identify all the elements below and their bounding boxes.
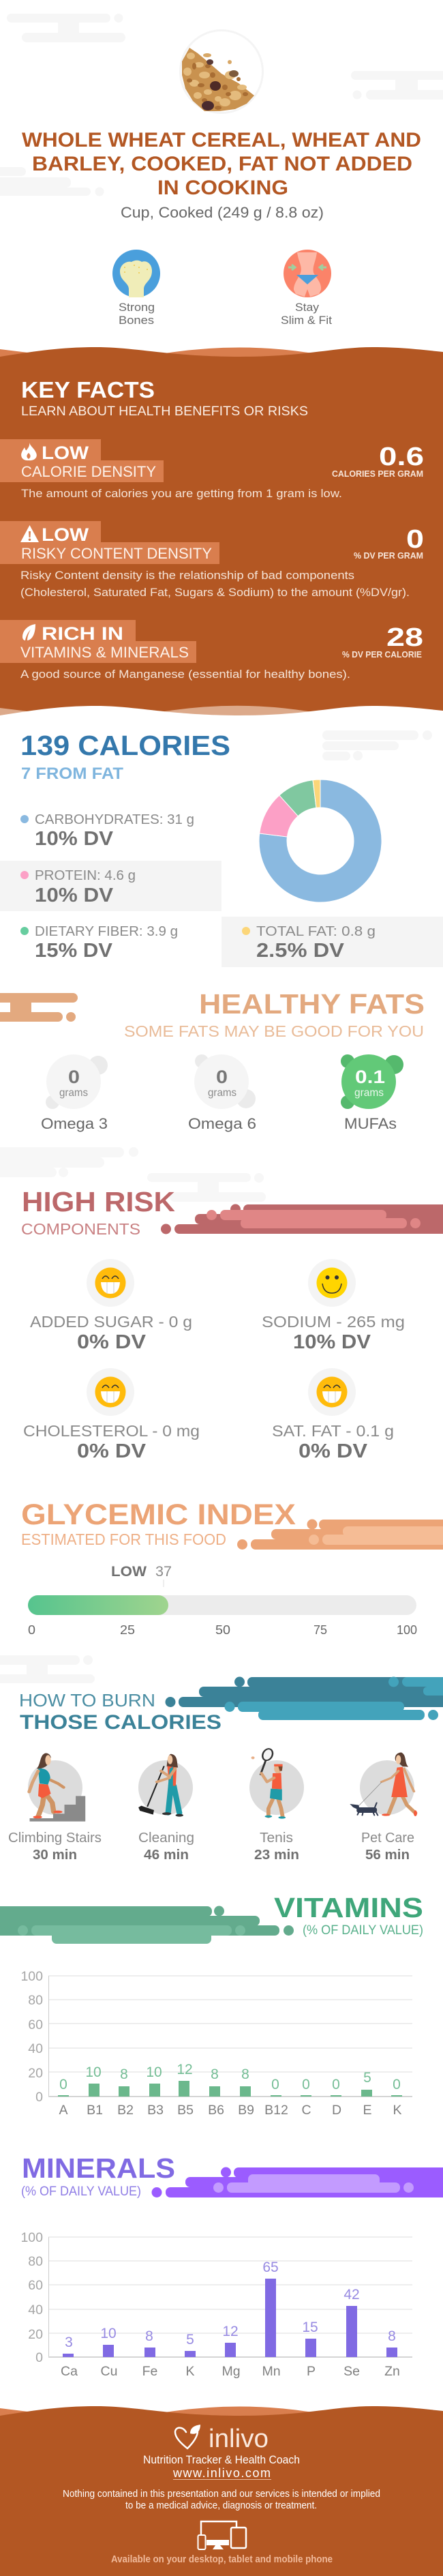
bar chart: vitamins: B12 (264, 2103, 288, 2118)
fat: MUFAs: 0.1 (355, 1067, 385, 1087)
title: IN COOKING (157, 177, 288, 199)
icon: warning triangle (20, 525, 39, 542)
bar chart: minerals: Ca (61, 2364, 78, 2379)
benefit label: strong bones: Bones (119, 314, 154, 327)
decoration: high risk banner (161, 1204, 443, 1234)
nutrient: total fat (222, 917, 443, 967)
stat: 0.6 calories per gram: CALORIES PER GRAM (332, 469, 423, 479)
fat: omega 3: 0 (68, 1067, 80, 1087)
stat: 28 % DV per calorie (342, 623, 423, 660)
activity: tennis (249, 1748, 304, 1863)
risk item: added sugar (30, 1259, 192, 1353)
icon: inlivo heart logo (175, 2425, 200, 2448)
bar chart: vitamins: B6 (208, 2103, 224, 2118)
risk item: cholesterol: 0% DV (77, 1440, 147, 1462)
bar chart: vitamins: 100 (20, 1969, 43, 1984)
bar chart: vitamins: 8 (241, 2067, 249, 2082)
benefit label: stay slim and fit (281, 301, 332, 327)
icon: devices (198, 2521, 246, 2549)
bar chart: minerals: 40 (28, 2303, 43, 2318)
activity: climbing stairs: 30 min (33, 1848, 77, 1863)
bar chart: vitamins: A (59, 2103, 68, 2118)
bar chart: minerals: 20 (28, 2327, 43, 2342)
fat: omega 6: grams (208, 1087, 236, 1099)
bar chart: minerals: P (307, 2364, 316, 2379)
fat: omega 6 (188, 1054, 256, 1132)
fat: omega 6: Omega 6 (188, 1115, 256, 1132)
icon: leaf (22, 624, 35, 640)
bar chart: minerals: 42 (343, 2287, 360, 2303)
stat: 0.6 calories per gram (332, 443, 424, 479)
subheading: minerals daily value: (% OF DAILY VALUE) (21, 2184, 141, 2199)
tagline: Nutrition Tracker & Health Coach (143, 2453, 300, 2466)
bar chart: vitamins: 0 (59, 2077, 67, 2092)
risk item: saturated fat: 0% DV (299, 1440, 368, 1462)
activity: climbing stairs: Climbing Stairs (8, 1831, 102, 1846)
nutrient: protein: PROTEIN: 4.6 g (35, 868, 136, 883)
fact tag: risky content density (0, 521, 219, 564)
heading: how to burn: HOW TO BURN (19, 1690, 155, 1711)
activity: climbing stairs (8, 1753, 102, 1863)
nutrient: protein (0, 861, 222, 911)
panel: key facts (0, 347, 443, 723)
bar chart: minerals: Mg (222, 2364, 241, 2379)
decoration: vitamins banner (0, 1906, 294, 1944)
fat: omega 6: 0 (216, 1067, 228, 1087)
risk item: sodium (262, 1259, 405, 1353)
bar chart: minerals: 12 (222, 2324, 239, 2339)
bar chart: vitamins: 0 (332, 2077, 340, 2092)
stat: 0 % DV per gram: 0 (406, 525, 424, 554)
stat: 28 % DV per calorie: 28 (386, 623, 423, 652)
stat: 0 % DV per gram (354, 525, 424, 561)
activity: cleaning (138, 1754, 194, 1863)
fact tag: calorie density: CALORIE DENSITY (21, 463, 156, 480)
bar chart: vitamins: B3 (147, 2103, 164, 2118)
fat: MUFAs: MUFAs (344, 1115, 397, 1132)
bar chart: minerals: K (185, 2364, 195, 2379)
bar chart: vitamins: 0 (271, 2077, 279, 2092)
bar chart: minerals: 0 (35, 2350, 43, 2365)
heading: those calories: THOSE CALORIES (20, 1711, 222, 1734)
glycemic progress bar (28, 1595, 416, 1615)
bar chart: vitamins: C (301, 2103, 311, 2118)
bar chart: vitamins: 12 (177, 2062, 193, 2077)
risk item: sodium: SODIUM - 265 mg (262, 1313, 405, 1331)
fat: omega 3: grams (59, 1087, 88, 1099)
activity: tennis: Tenis (260, 1831, 293, 1846)
availability note: Available on your desktop, tablet and mobile phone (111, 2553, 333, 2565)
bar chart: vitamins: D (332, 2103, 341, 2118)
description: risky content density (20, 569, 410, 599)
glycemic axis labels: 50 (215, 1623, 230, 1637)
risk item: cholesterol: CHOLESTEROL - 0 mg (23, 1422, 200, 1440)
title: WHOLE WHEAT CEREAL, WHEAT AND (22, 129, 421, 151)
description: risky content density: Risky Content density is the relationship of bad components (20, 569, 354, 582)
bar chart: vitamins: 20 (28, 2066, 43, 2081)
disclaimer: Nothing contained in this presentation and our services is intended or implied (63, 2488, 380, 2500)
description: calorie density: The amount of calories you are getting from 1 gram is low. (21, 487, 342, 500)
risk item: sodium: 10% DV (293, 1331, 371, 1353)
heading: high risk: HIGH RISK (22, 1186, 175, 1217)
nutrient: dietary fiber: DIETARY FIBER: 3.9 g (35, 923, 178, 939)
risk item: saturated fat: SAT. FAT - 0.1 g (272, 1422, 394, 1440)
subheading: from fat: 7 FROM FAT (21, 765, 123, 783)
bar chart: minerals: 60 (28, 2278, 43, 2293)
nutrient: dietary fiber (20, 923, 178, 962)
bar chart: minerals: 80 (28, 2254, 43, 2269)
glycemic axis labels: 75 (314, 1623, 327, 1637)
subheading: estimated: ESTIMATED FOR THIS FOOD (21, 1530, 226, 1548)
bar chart: minerals: Cu (101, 2364, 117, 2379)
glycemic axis labels: 25 (120, 1623, 135, 1637)
decoration: minerals banner (151, 2167, 443, 2197)
description: risky content density: (Cholesterol, Saturated Fat, Sugars & Sodium) to the amount (%DV/gr). (20, 586, 410, 599)
glycemic value label: 37 (155, 1564, 172, 1580)
heading: 139 calories: 139 CALORIES (20, 730, 230, 761)
activity: pet care: Pet Care (361, 1831, 414, 1846)
bar chart: minerals: 10 (100, 2326, 117, 2341)
nutrient: dietary fiber: 15% DV (35, 940, 113, 962)
fact tag: rich in vitamins and minerals: VITAMINS & MINERALS (20, 644, 189, 661)
bar chart: vitamins: E (363, 2103, 372, 2118)
benefit label: strong bones (119, 301, 155, 327)
bar chart: vitamins: 10 (85, 2064, 102, 2080)
fat: MUFAs: grams (354, 1087, 384, 1099)
description: vitamins and minerals: A good source of Manganese (essential for healthy bones). (20, 668, 350, 681)
serving size: Cup, Cooked (249 g / 8.8 oz) (121, 204, 324, 221)
stat: 0 % DV per gram: % DV PER GRAM (354, 550, 423, 561)
fat: omega 3: Omega 3 (41, 1115, 108, 1132)
bar chart: vitamins: B2 (117, 2103, 134, 2118)
bar chart: vitamins: 0 (302, 2077, 310, 2092)
bar chart: minerals: 65 (262, 2260, 279, 2275)
bar chart: vitamins: 80 (28, 1993, 43, 2008)
decoration: healthy fats banner (0, 993, 78, 1022)
bar chart: minerals: 8 (145, 2328, 153, 2344)
fact tag: rich in vitamins and minerals: RICH IN (42, 623, 123, 644)
bar chart: minerals: 100 (20, 2230, 43, 2245)
disclaimer: to be a medical advice, diagnosis or treatment. (125, 2500, 317, 2511)
icon: flame (21, 443, 37, 460)
bar chart: minerals: Mn (262, 2364, 281, 2379)
bar chart: vitamins: 40 (28, 2041, 43, 2056)
disclaimer (63, 2488, 380, 2511)
bar chart: vitamins: 8 (120, 2067, 128, 2082)
icon: strong bones (112, 250, 160, 297)
risk item: added sugar: 0% DV (77, 1331, 147, 1353)
heading: minerals: MINERALS (22, 2152, 175, 2184)
bar chart: minerals: 3 (65, 2335, 73, 2350)
subheading: components: COMPONENTS (21, 1220, 140, 1238)
fact tag: risky content density: RISKY CONTENT DENSITY (21, 545, 212, 562)
risk item: cholesterol (23, 1368, 200, 1462)
subheading: LEARN ABOUT HEALTH BENEFITS OR RISKS (21, 404, 308, 419)
bar chart: vitamins: 60 (28, 2017, 43, 2032)
activity: cleaning: Cleaning (138, 1831, 194, 1846)
fact tag: calorie density (0, 439, 164, 482)
title (22, 129, 421, 199)
bar chart: vitamins: 10 (146, 2064, 162, 2080)
bar chart: vitamins: B5 (177, 2103, 194, 2118)
glycemic axis labels (28, 1623, 417, 1637)
website: www.inlivo.com (172, 2466, 271, 2480)
glycemic axis labels: 0 (28, 1623, 35, 1637)
bar chart: vitamins: 5 (363, 2070, 371, 2086)
benefit label: stay slim and fit: Slim & Fit (281, 314, 332, 327)
title: BARLEY, COOKED, FAT NOT ADDED (32, 153, 412, 175)
bar chart: minerals: 5 (186, 2332, 194, 2348)
panel: footer (0, 2406, 443, 2576)
bar chart: minerals: 8 (388, 2328, 396, 2344)
activity: pet care (350, 1752, 417, 1863)
activity: cleaning: 46 min (144, 1848, 189, 1863)
bar chart: minerals (20, 2230, 412, 2379)
food image: cereal in circle (180, 30, 263, 113)
nutrient: carbohydrates: CARBOHYDRATES: 31 g (35, 812, 194, 827)
bar chart: vitamins: 0 (35, 2090, 43, 2105)
nutrient: protein: 10% DV (35, 885, 114, 906)
glycemic axis labels: 100 (397, 1623, 417, 1637)
fat: omega 3 (41, 1054, 108, 1132)
bar chart: vitamins: B1 (87, 2103, 103, 2118)
subheading: healthy fats: SOME FATS MAY BE GOOD FOR YOU (124, 1022, 424, 1040)
glycemic value label: LOW (111, 1564, 147, 1580)
risk item: added sugar: ADDED SUGAR - 0 g (30, 1313, 192, 1331)
heading: key facts: KEY FACTS (21, 377, 155, 402)
activity: tennis: 23 min (254, 1848, 299, 1863)
icon: slim and fit (284, 250, 331, 297)
subheading: vitamins daily value: (% OF DAILY VALUE) (303, 1923, 423, 1938)
donut chart: macronutrients (259, 780, 382, 902)
heading: healthy fats: HEALTHY FATS (199, 988, 425, 1020)
heading: glycemic index: GLYCEMIC INDEX (21, 1498, 296, 1531)
stat: 0.6 calories per gram: 0.6 (379, 443, 424, 471)
fact tag: rich in vitamins and minerals (0, 620, 196, 663)
bar chart: minerals: Se (343, 2364, 360, 2379)
decoration: burn calories banner (165, 1676, 443, 1720)
nutrient: total fat: TOTAL FAT: 0.8 g (256, 923, 376, 939)
decoration: glycemic banner (237, 1520, 443, 1550)
stat: 28 % DV per calorie: % DV PER CALORIE (342, 649, 422, 660)
bar chart: vitamins: K (393, 2103, 402, 2118)
nutrient: total fat: 2.5% DV (256, 940, 345, 962)
fat: MUFAs (341, 1054, 403, 1132)
bar chart: vitamins: B9 (238, 2103, 254, 2118)
bar chart: vitamins: 0 (393, 2077, 401, 2092)
activity: pet care: 56 min (365, 1848, 410, 1863)
nutrient: carbohydrates (20, 812, 194, 850)
brand name: inlivo (209, 2425, 269, 2453)
glycemic value label (111, 1564, 172, 1587)
benefit label: strong bones: Strong (119, 301, 155, 314)
bar chart: minerals: Fe (142, 2364, 157, 2379)
bar chart: vitamins (20, 1969, 412, 2118)
nutrient: carbohydrates: 10% DV (35, 828, 114, 850)
bar chart: minerals: Zn (384, 2364, 400, 2379)
bar chart: vitamins: 8 (211, 2067, 219, 2082)
fact tag: risky content density: LOW (42, 524, 89, 545)
risk item: saturated fat (272, 1368, 394, 1462)
benefit label: stay slim and fit: Stay (295, 301, 319, 314)
fact tag: calorie density: LOW (42, 443, 89, 463)
heading: vitamins: VITAMINS (274, 1892, 423, 1923)
bar chart: minerals: 15 (302, 2320, 318, 2335)
